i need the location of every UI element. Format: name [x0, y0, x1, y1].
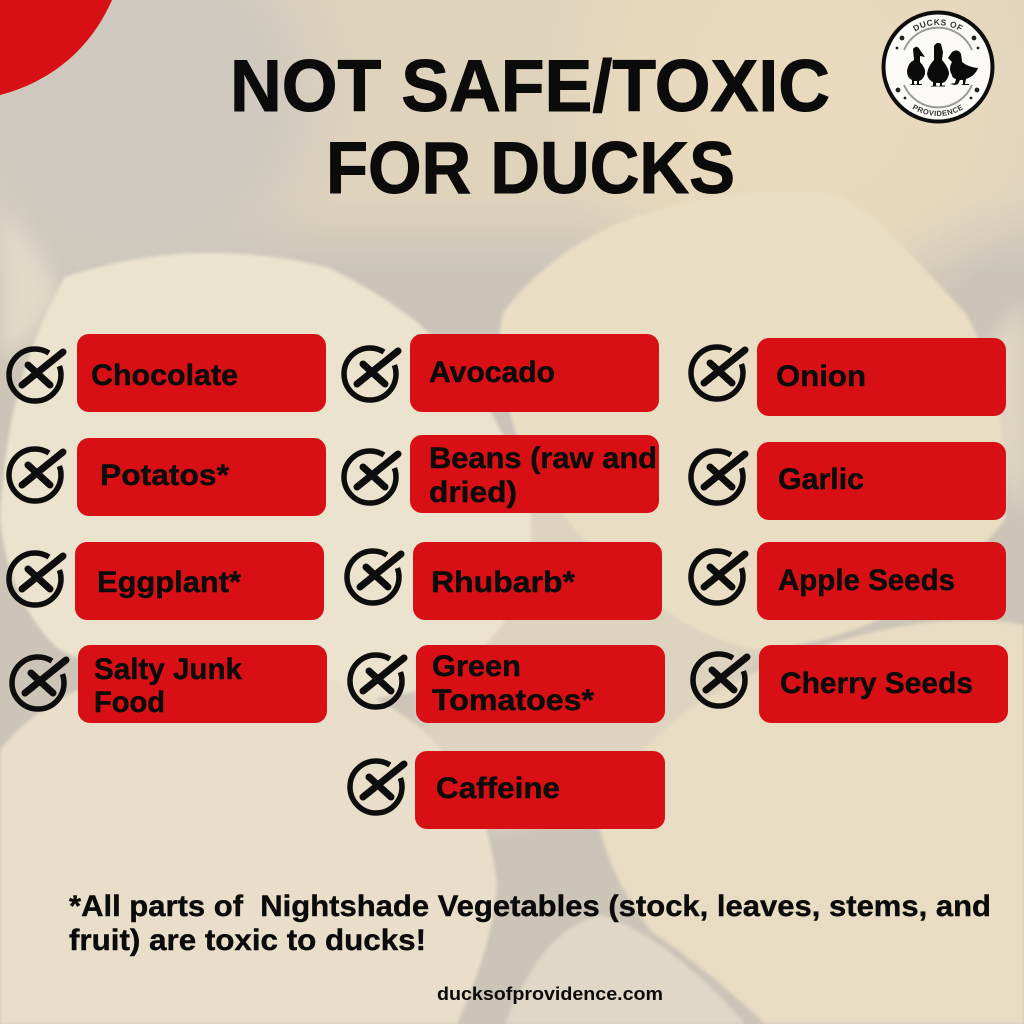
- website: ducksofprovidence.com: [437, 983, 663, 1004]
- item: Apple Seeds: [691, 542, 1006, 620]
- item: Onion: [691, 338, 1006, 416]
- item: Beans: [344, 435, 659, 513]
- logo: Ducks of Providence: PROVIDENCE: [912, 104, 964, 116]
- list column 2: [344, 334, 665, 829]
- title: [230, 46, 830, 209]
- list column 1: [9, 334, 327, 723]
- item: Chocolate: Chocolate: [91, 359, 238, 392]
- item: Eggplant: Eggplant*: [97, 566, 241, 599]
- item: Salty Junk Food: Salty Junk: [94, 653, 242, 686]
- title: FOR DUCKS: [326, 128, 735, 209]
- bottom middle potato: [505, 915, 745, 1024]
- item: Salty Junk Food: [12, 645, 327, 723]
- item: Beans: Beans (raw and: [429, 442, 657, 475]
- upper right potato: [500, 191, 1006, 650]
- item: Avocado: Avocado: [429, 356, 555, 389]
- item: Green Tomatoes: [350, 645, 665, 723]
- upper left potato: [0, 253, 532, 702]
- item: Potatos: [9, 438, 326, 516]
- footnote: fruit) are toxic to ducks!: [69, 924, 426, 957]
- item: Avocado: [344, 334, 659, 412]
- lower right potato: [600, 620, 1024, 1024]
- item: Rhubarb: [347, 542, 662, 620]
- item: Caffeine: [350, 751, 665, 829]
- item: Onion: Onion: [776, 360, 866, 393]
- item: Beans: dried): [429, 476, 517, 509]
- item: Eggplant: [9, 542, 324, 620]
- item: Garlic: [691, 442, 1006, 520]
- logo: Ducks of Providence: DUCKS OF: [912, 19, 964, 32]
- icon: right duck: [948, 50, 978, 85]
- title: NOT SAFE/TOXIC: [230, 46, 830, 127]
- item: Garlic: Garlic: [778, 463, 864, 496]
- icon: middle duck: [927, 43, 949, 86]
- logo: Ducks of Providence: [882, 10, 994, 124]
- item: Potatos: Potatos*: [100, 459, 229, 492]
- footnote: *All parts of Nightshade Vegetables (stock, leaves, stems, and: [69, 890, 991, 923]
- footnote: [69, 890, 991, 957]
- lower left potato: [0, 658, 497, 1024]
- list column 3: [691, 338, 1008, 723]
- item: Cherry Seeds: Cherry Seeds: [780, 667, 973, 700]
- red corner circle: [0, 0, 112, 95]
- item: Green Tomatoes: Green: [432, 650, 521, 683]
- item: Apple Seeds: Apple Seeds: [778, 564, 955, 597]
- icon: left duck: [907, 47, 925, 85]
- item: Caffeine: Caffeine: [436, 772, 560, 805]
- item: Green Tomatoes: Tomatoes*: [432, 684, 594, 717]
- item: Chocolate: [9, 334, 326, 412]
- item: Cherry Seeds: [693, 645, 1008, 723]
- item: Salty Junk Food: Food: [94, 686, 165, 719]
- item: Rhubarb: Rhubarb*: [431, 566, 575, 599]
